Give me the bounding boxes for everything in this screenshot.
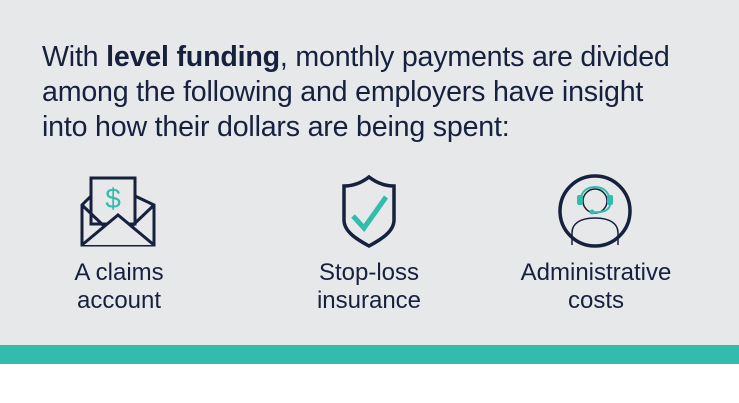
icon: support agent xyxy=(558,174,632,248)
icon: envelope with dollar xyxy=(80,176,156,246)
label: admin: Administrative xyxy=(521,259,671,286)
title: With level funding, monthly payments are divided xyxy=(42,41,670,73)
label: claims: A claims xyxy=(74,259,164,286)
label: stop-loss: insurance xyxy=(317,287,421,314)
icon: envelope with dollar: $ xyxy=(105,183,121,214)
label: stop-loss: Stop-loss xyxy=(319,259,419,286)
label: admin xyxy=(520,259,671,314)
title: among the following and employers have insight xyxy=(42,76,643,108)
label: stop-loss xyxy=(317,259,421,314)
label: claims: account xyxy=(77,287,161,314)
title xyxy=(42,41,670,143)
label: admin: costs xyxy=(568,287,624,314)
label: claims xyxy=(74,259,164,314)
title: into how their dollars are being spent: xyxy=(42,111,509,143)
icon: shield with check xyxy=(342,174,396,248)
